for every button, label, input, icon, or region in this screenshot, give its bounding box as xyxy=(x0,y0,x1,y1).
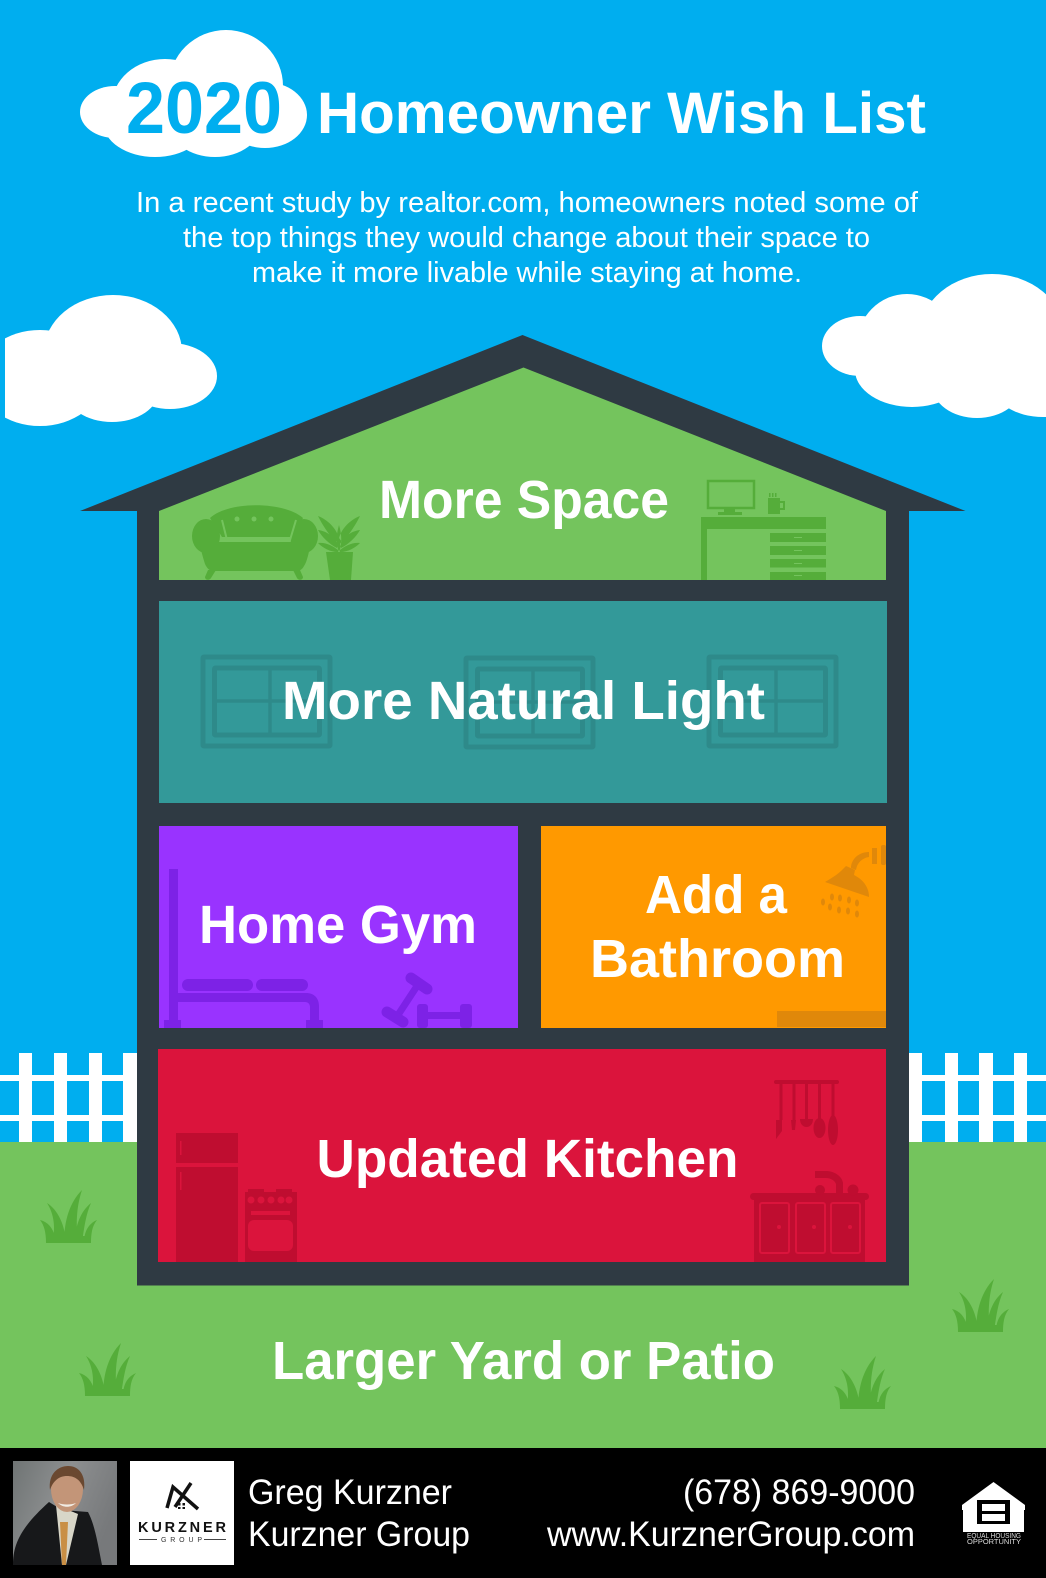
ground lawn xyxy=(0,1142,1046,1448)
room label xyxy=(590,865,845,989)
intro text: make it more livable while staying at home. xyxy=(252,257,802,289)
right fence xyxy=(909,1053,1046,1142)
icon: equal housing opportunity: EQUAL HOUSING xyxy=(967,1533,1021,1540)
icon: desk with computer xyxy=(701,481,826,580)
room label: More Space xyxy=(379,470,669,530)
left fence xyxy=(0,1053,137,1142)
icon: equal housing opportunity xyxy=(962,1482,1025,1546)
icon: potted plant xyxy=(318,516,360,580)
room: add a bathroom xyxy=(541,826,886,1028)
icon: grass tuft xyxy=(40,1190,97,1243)
logo sub-wordmark: GROUP xyxy=(161,1537,202,1544)
logo wordmark: KURZNER xyxy=(138,1520,227,1536)
right cloud xyxy=(822,274,1046,418)
icon: grass tuft xyxy=(952,1279,1009,1332)
company logo xyxy=(130,1461,234,1565)
icon: bathroom floor xyxy=(777,1011,886,1027)
agent portrait xyxy=(13,1461,117,1565)
icon: grass tuft xyxy=(79,1343,136,1396)
room label: Home Gym xyxy=(199,895,477,955)
icon: hanging utensils xyxy=(774,1080,839,1145)
company name: Kurzner Group xyxy=(248,1515,470,1554)
intro text: In a recent study by realtor.com, homeowners noted some of xyxy=(136,187,919,219)
icon: weight bench xyxy=(164,869,323,1028)
attic room: more space xyxy=(159,368,886,580)
left cloud xyxy=(0,295,217,426)
room label: Updated Kitchen xyxy=(316,1129,738,1189)
year: 2020 xyxy=(126,68,282,149)
room: updated kitchen xyxy=(158,1049,886,1262)
icon: stove xyxy=(245,1189,297,1262)
house frame xyxy=(80,335,966,1286)
house xyxy=(80,335,966,1286)
room label: Bathroom xyxy=(590,929,845,989)
icon: refrigerator xyxy=(176,1133,238,1262)
room label: Add a xyxy=(645,865,788,925)
phone number: (678) 869-9000 xyxy=(683,1473,915,1512)
logo mark xyxy=(167,1483,198,1509)
intro text xyxy=(136,187,919,289)
intro text: the top things they would change about their space to xyxy=(183,222,870,254)
yard label: Larger Yard or Patio xyxy=(272,1331,775,1391)
icon: shower xyxy=(821,845,886,918)
footer xyxy=(0,1448,1046,1578)
footer background xyxy=(0,1448,1046,1578)
room: home gym xyxy=(159,826,518,1028)
icon: dumbbells xyxy=(387,978,472,1028)
room label: More Natural Light xyxy=(282,671,765,731)
cloud behind 2020 xyxy=(80,30,307,157)
icon: grass tuft xyxy=(834,1356,891,1409)
room: more natural light xyxy=(159,601,887,803)
icon: sink cabinet xyxy=(750,1171,869,1262)
agent name: Greg Kurzner xyxy=(248,1473,452,1512)
icon: equal housing opportunity: OPPORTUNITY xyxy=(967,1539,1021,1546)
website: www.KurznerGroup.com xyxy=(546,1515,915,1554)
icon: sofa xyxy=(192,505,318,580)
title xyxy=(80,30,926,157)
title text: Homeowner Wish List xyxy=(317,81,926,146)
icon: windows xyxy=(203,657,836,747)
